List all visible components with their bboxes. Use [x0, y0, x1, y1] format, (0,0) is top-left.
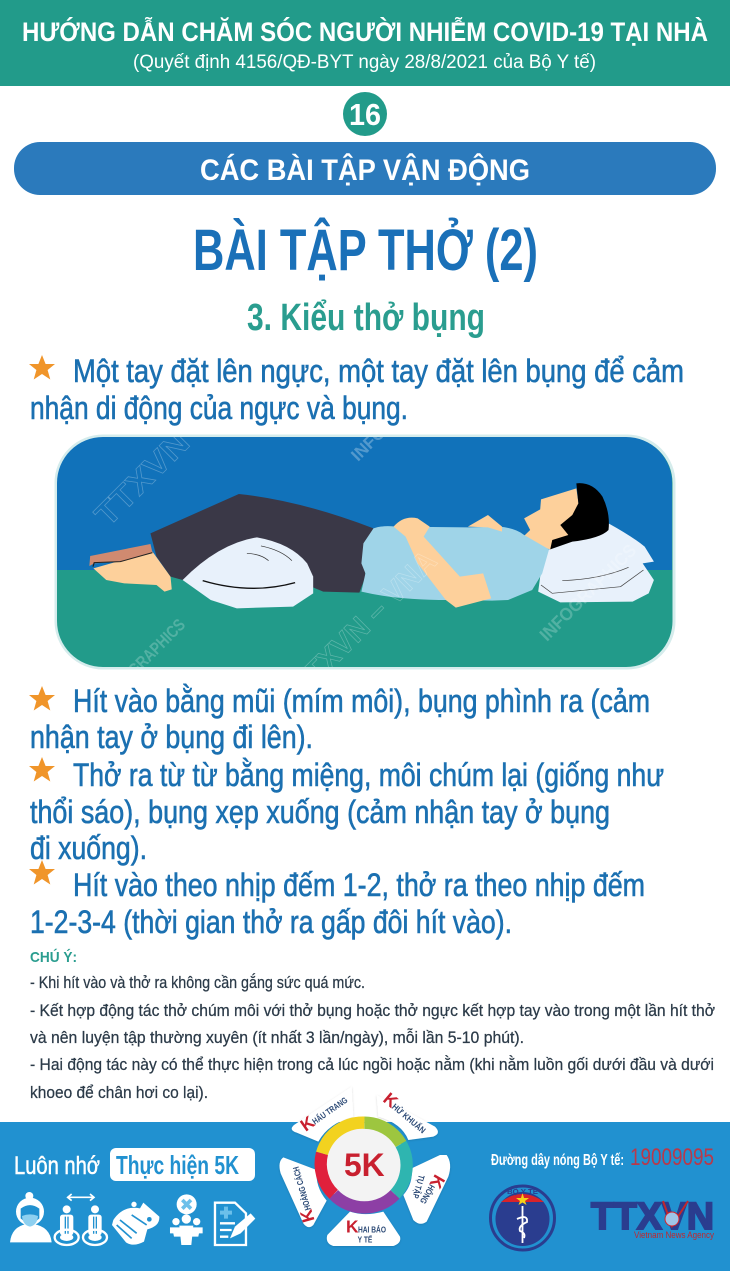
logo: TTXVN: Vietnam News Agency — [634, 1230, 714, 1241]
icon: washing hands — [112, 1202, 159, 1245]
instruction 3 — [29, 757, 664, 866]
main title: BÀI TẬP THỞ (2) — [193, 218, 538, 283]
header band — [0, 0, 730, 86]
petal labels: K — [346, 1217, 359, 1237]
petal labels: TỤ TẬP — [410, 1174, 428, 1200]
illustration panel: person lying down breathing — [54, 434, 676, 670]
petal labels: HÔNG — [418, 1183, 438, 1206]
watermarks: TTXVN — [87, 424, 196, 533]
reminder label — [14, 1148, 255, 1181]
icon: person with mask — [10, 1192, 52, 1242]
instruction 4 — [29, 860, 645, 940]
petal labels: K — [296, 1111, 319, 1135]
header subtitle: (Quyết định 4156/QĐ-BYT ngày 28/8/2021 của Bộ Y tế) — [133, 52, 596, 73]
ring — [321, 1123, 407, 1207]
logo: TTXVN: TTXVN — [591, 1196, 714, 1238]
petal labels: K — [379, 1088, 402, 1112]
watermarks: INFOGRAPHICS — [536, 540, 640, 645]
5K wheel — [279, 1087, 450, 1246]
icon: health declaration — [215, 1203, 255, 1245]
logo: Ministry of Health — [490, 1186, 554, 1250]
centre label: 5K — [344, 1147, 385, 1183]
icon: keep distance — [55, 1194, 107, 1245]
instruction 3: đi xuống). — [30, 830, 147, 866]
petal labels: HỬ KHUẨN — [390, 1101, 428, 1135]
instruction 1: nhận di động của ngực và bụng. — [30, 390, 408, 426]
petal labels: HOẢNG CÁCH — [290, 1165, 313, 1212]
5K icons row — [10, 1192, 255, 1245]
logo: Ministry of Health: BỘ Y TẾ — [507, 1186, 538, 1196]
hotline — [491, 1144, 714, 1171]
section banner: CÁC BÀI TẬP VẬN ĐỘNG — [200, 153, 530, 187]
petal labels: Y TẾ — [358, 1234, 372, 1244]
notes — [30, 948, 715, 1102]
notes: - Khi hít vào và thở ra không cần gắng sức quá mức. — [30, 973, 365, 992]
notes: và nên luyện tập thường xuyên (ít nhất 3 lần/ngày), mỗi lần 5-10 phút). — [30, 1028, 524, 1047]
notes: khoeo để chân hơi co lại). — [30, 1083, 208, 1102]
reminder label: Luôn nhớ — [14, 1152, 100, 1180]
section banner — [14, 142, 716, 195]
petal labels: HẨU TRANG — [310, 1094, 349, 1126]
notes: CHÚ Ý: — [30, 948, 77, 966]
number badge 16 — [343, 92, 387, 136]
instruction 2 — [29, 683, 650, 755]
petal labels: K — [296, 1207, 319, 1225]
instruction 4: 1-2-3-4 (thời gian thở ra gấp đôi hít vào). — [30, 904, 512, 940]
hotline: Đường dây nóng Bộ Y tế: — [491, 1152, 624, 1169]
instruction 2: nhận tay ở bụng đi lên). — [30, 719, 313, 755]
watermarks: TTXVN – VNA — [286, 544, 443, 702]
icon: no gathering — [170, 1194, 203, 1245]
instruction 1 — [29, 353, 684, 426]
watermarks: INFOGRAPHICS — [347, 359, 453, 465]
footer band — [0, 1122, 730, 1271]
petals — [279, 1087, 450, 1246]
watermarks: INFOGRAPHICS — [101, 615, 189, 703]
person and pillows — [89, 483, 654, 608]
watermarks — [92, 437, 617, 667]
subtitle: 3. Kiểu thở bụng — [247, 297, 485, 339]
petal labels — [284, 1088, 449, 1244]
petal labels: HAI BÁO — [358, 1225, 386, 1235]
reminder label: Thực hiện 5K — [116, 1150, 239, 1180]
instruction 3: thổi sáo), bụng xẹp xuống (cảm nhận tay ở bụng — [30, 794, 610, 830]
petal labels: K — [425, 1171, 449, 1193]
number badge 16: 16 — [349, 97, 381, 132]
